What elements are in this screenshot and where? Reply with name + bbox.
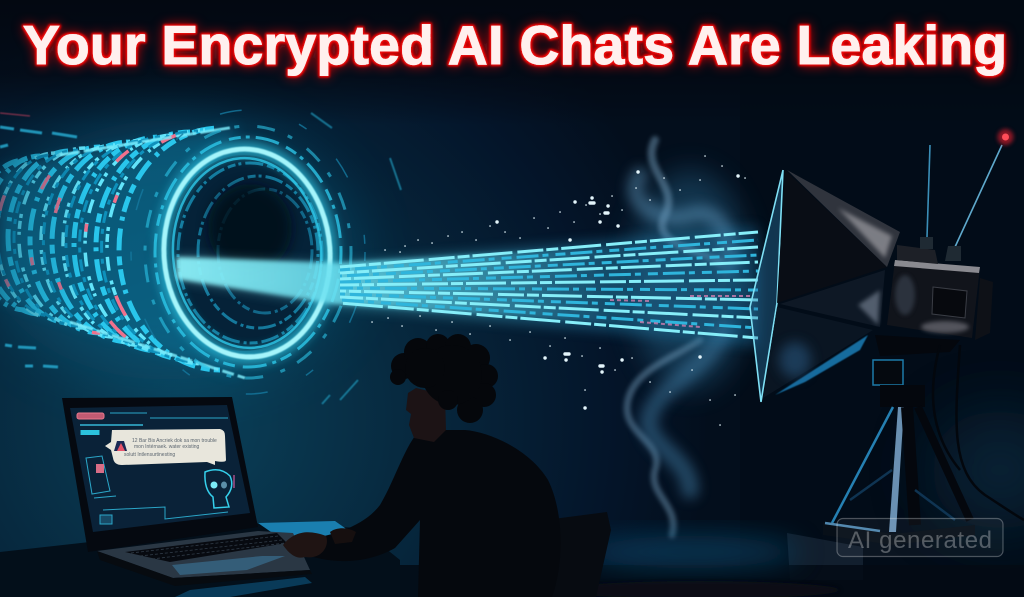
transparent mouth [750, 170, 783, 402]
tunnel outer rings on right [131, 110, 365, 394]
laptop base [97, 531, 310, 578]
cable [933, 345, 1024, 520]
glowing ring [157, 143, 337, 363]
laptop [62, 397, 312, 586]
ground [0, 536, 1024, 597]
horn top reflective panel [787, 170, 900, 267]
red beacon [998, 129, 1014, 145]
chat bubble [105, 429, 226, 465]
person silhouette [283, 334, 611, 597]
tunnel outer surface data arcs [0, 128, 220, 370]
horn antenna device [750, 129, 1024, 580]
camera body [887, 260, 980, 338]
watermark: AI generated: AI generated [848, 527, 992, 554]
neck and face [406, 388, 446, 442]
escaping particles [372, 156, 745, 425]
curly hair [390, 334, 498, 423]
horn middle panel [780, 270, 885, 327]
HUD streaks around the tunnel [0, 113, 401, 404]
hands [283, 532, 327, 558]
tunnel interior [166, 155, 322, 351]
title: Your Encrypted AI Chats Are Leaking [23, 14, 1007, 76]
laptop lid [62, 397, 258, 552]
tripod [787, 335, 975, 580]
data tunnel [0, 110, 365, 394]
body and arm [310, 430, 561, 597]
chat sidebar [77, 413, 228, 524]
antenna left [927, 145, 930, 237]
chat bubble: 12 Bar Bis Ancriek dok sa mon trouble [132, 438, 217, 444]
horn lower panel [763, 307, 873, 398]
smoke [627, 140, 750, 535]
robot icon [205, 470, 234, 508]
laptop screen [70, 405, 250, 532]
tunnel top and bottom edge streaks [60, 127, 245, 378]
laptop keyboard [125, 533, 287, 562]
antenna right [955, 145, 1002, 247]
chair [520, 512, 611, 597]
chat bubble: solutt Intlensurtinesting [124, 452, 175, 458]
watermark: AI generated [837, 518, 1003, 556]
chat bubble: mon Intérnaek. water existing [134, 444, 200, 450]
horn upper panel [777, 170, 887, 303]
data beam [177, 226, 758, 347]
table [0, 521, 400, 597]
